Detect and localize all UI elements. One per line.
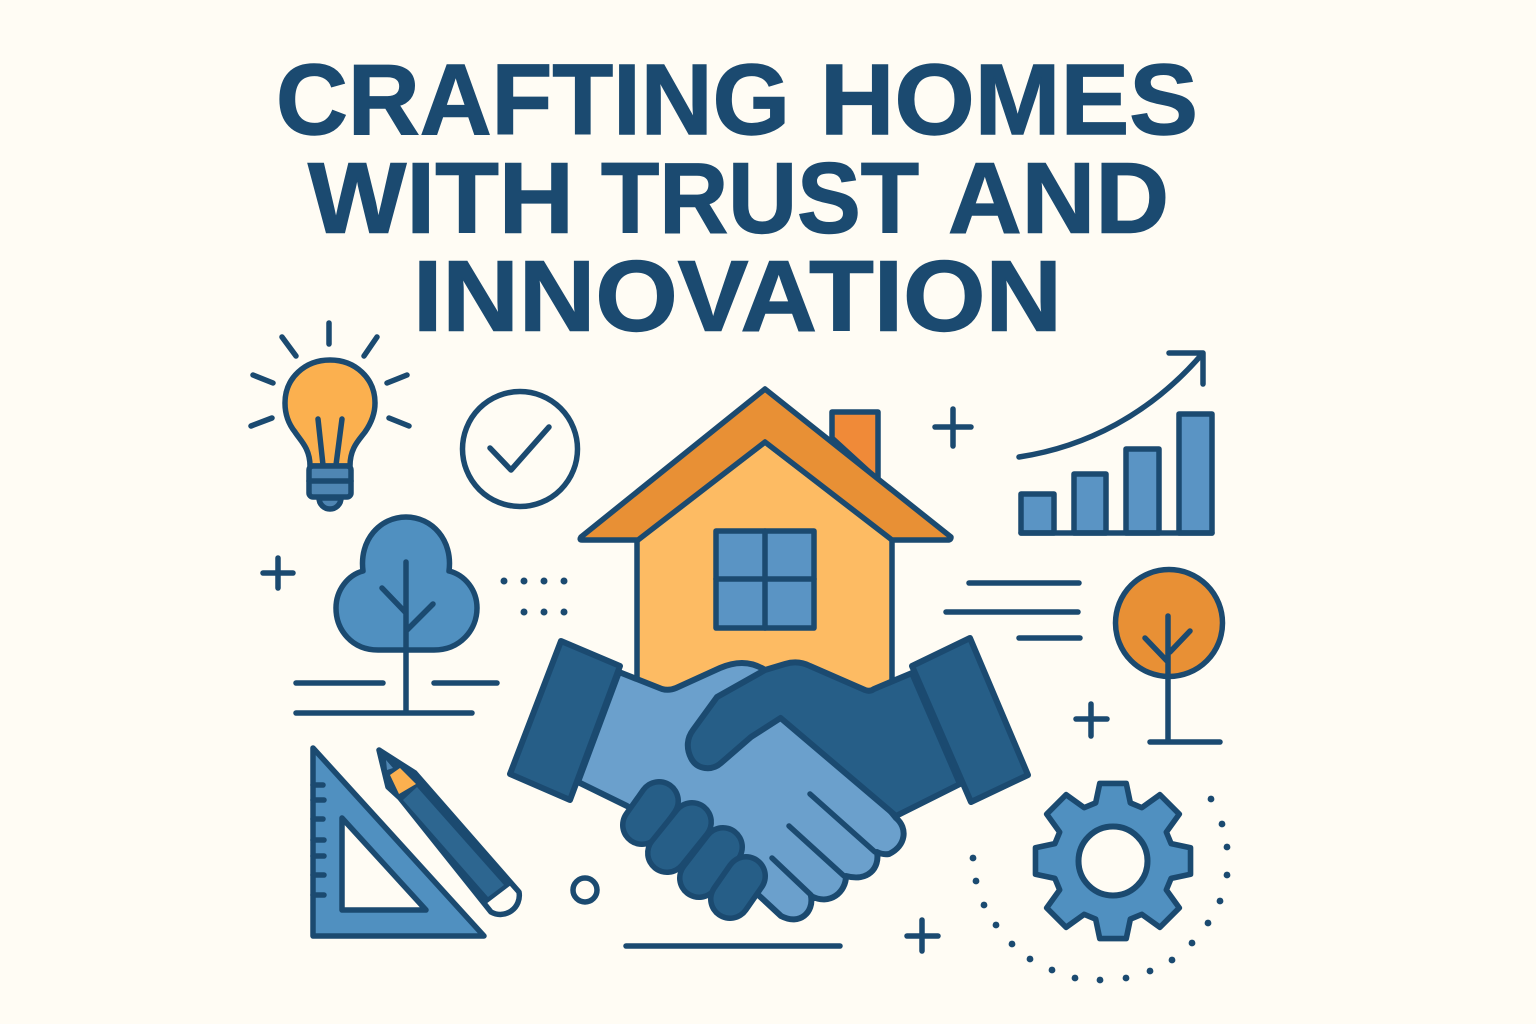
title: AND [948,142,1169,254]
icon: pencil [379,750,519,914]
left light hand [578,663,904,919]
icon: check mark circle [462,392,578,506]
icon: house [580,389,951,700]
title [276,44,1198,352]
growth arrow [1019,353,1203,457]
small ring [573,878,597,902]
left cuff [510,641,620,800]
bars [1021,414,1212,533]
icon: gear [1035,783,1191,939]
title: CRAFTING [276,44,790,156]
finger lines [772,794,875,895]
right dark hand [688,662,960,816]
icon: blue tree [296,517,497,713]
icon: set square ruler [313,748,484,936]
house body [637,442,892,700]
title: TRUST [601,142,919,254]
dark fingers [642,801,746,899]
icon: plus bottom [907,920,938,951]
icon: plus left [263,558,293,588]
dotted arc around gear [970,796,1230,983]
icon: plus right [1076,704,1107,736]
icon: orange tree [1116,570,1222,742]
icon: bar chart with growth arrow [1019,353,1212,533]
title: WITH [308,142,574,254]
dot grid [500,578,568,616]
roof [580,389,951,540]
icon: handshake [510,638,1028,919]
window [716,531,814,628]
icon: light bulb [251,323,409,509]
right cuff [912,638,1028,802]
speed lines [946,583,1080,638]
title: HOMES [820,44,1198,156]
icon: plus top right [935,409,971,446]
line under handshake [626,943,840,949]
title: INNOVATION [413,240,1062,352]
chimney [832,412,878,480]
